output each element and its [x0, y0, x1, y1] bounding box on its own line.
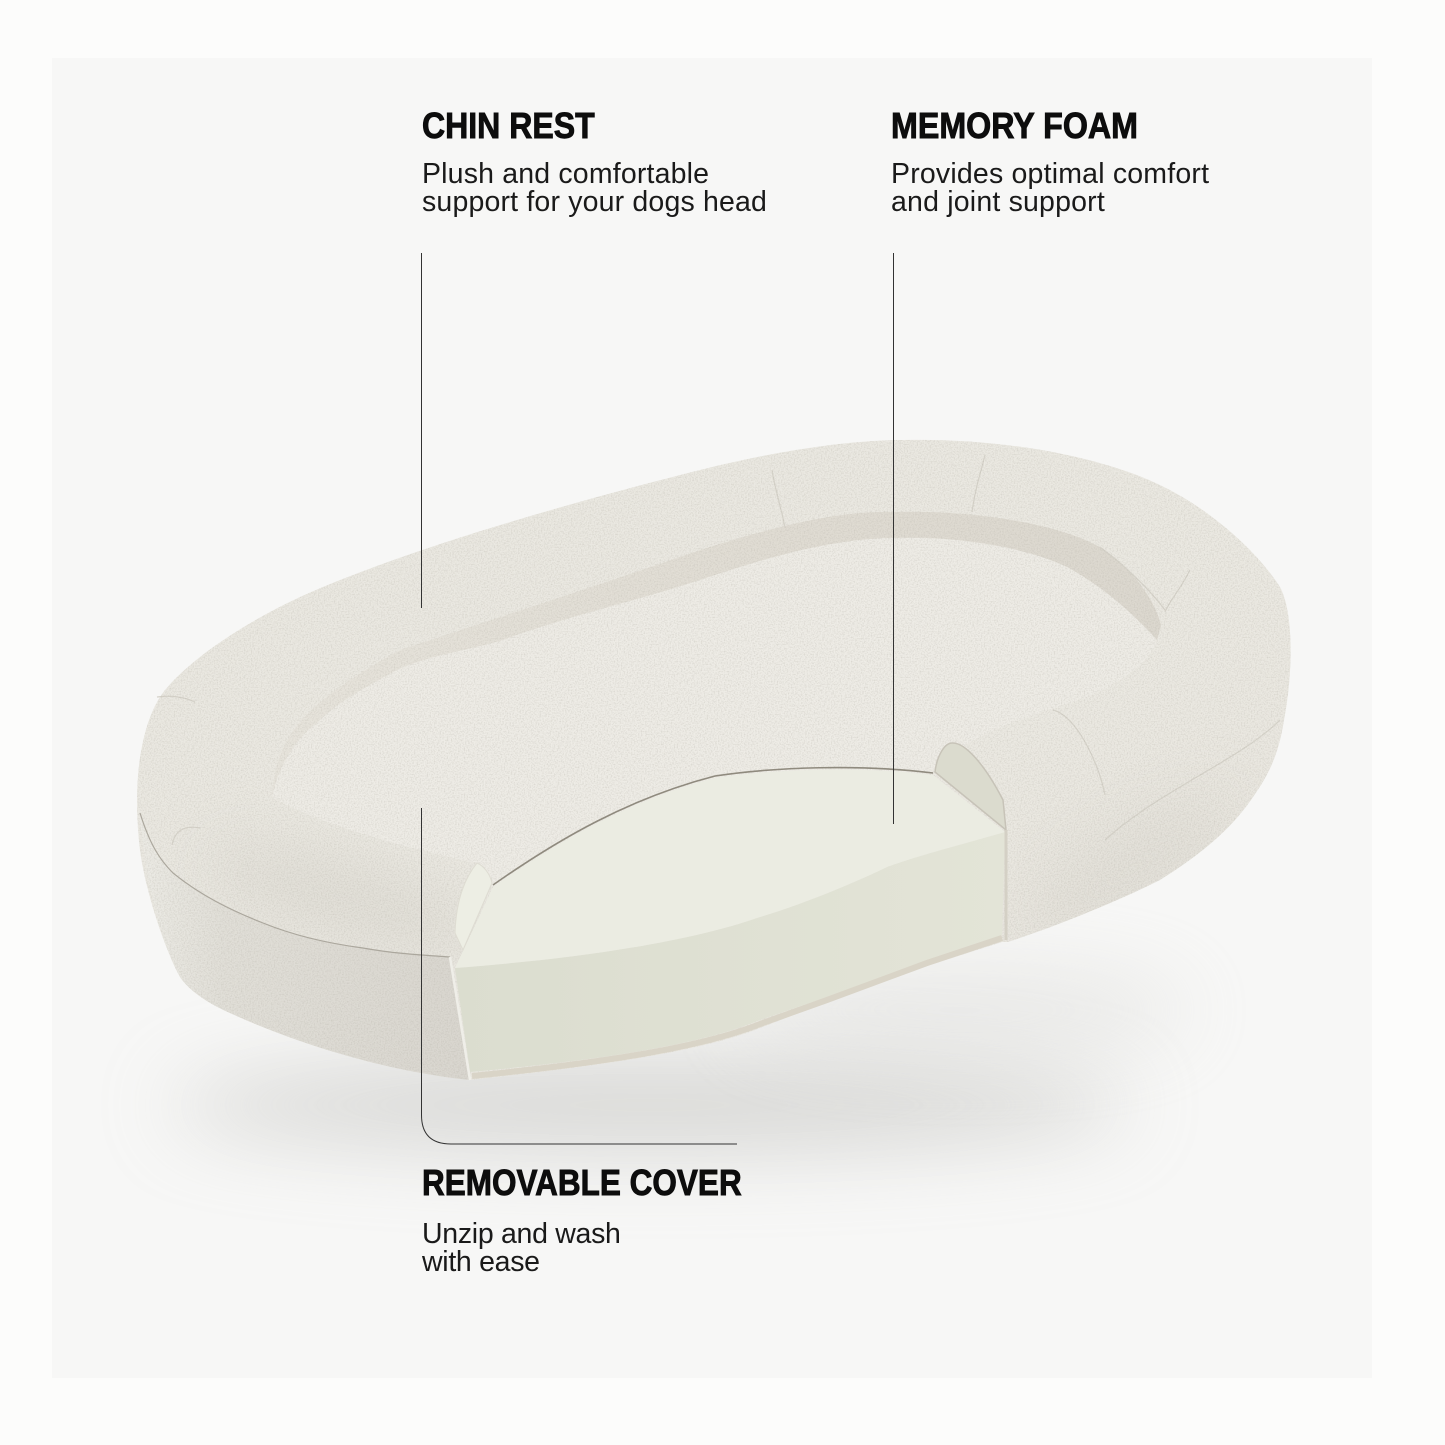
text: chin rest: support for your dogs head	[422, 186, 767, 218]
bed illustration	[137, 440, 1290, 1180]
floor shadow	[170, 970, 1190, 1151]
text: chin rest	[422, 158, 767, 218]
rim shading front left	[195, 775, 1254, 978]
heading: removable cover: REMOVABLE COVER	[422, 1162, 742, 1203]
front wall	[140, 813, 470, 1080]
text: removable cover: Unzip and wash	[422, 1218, 621, 1250]
foam side	[455, 832, 1005, 1072]
cushion cut edge	[493, 768, 933, 885]
foam disc right	[935, 743, 1006, 830]
cover flap left edge	[450, 957, 470, 1080]
text: memory foam: Provides optimal comfort	[891, 158, 1209, 190]
text: chin rest: Plush and comfortable	[422, 158, 709, 190]
text: removable cover: with ease	[422, 1246, 540, 1278]
leader line: memory foam	[893, 253, 894, 824]
inner channel	[272, 512, 1161, 797]
leader line: chin rest	[421, 253, 422, 608]
fabric texture	[130, 430, 1300, 1090]
foam disc left	[455, 863, 492, 950]
cover flap right edge	[1004, 830, 1008, 940]
foam base strip	[472, 938, 1002, 1076]
text: memory foam	[891, 158, 1209, 218]
foam top surface	[455, 770, 1005, 968]
heading: chin rest: CHIN REST	[422, 105, 595, 146]
text: memory foam: and joint support	[891, 186, 1105, 218]
leader line: removable cover	[421, 808, 737, 1144]
wall seam	[140, 813, 450, 957]
text: removable cover	[422, 1218, 621, 1278]
bed outer body	[137, 440, 1291, 1080]
cushion top	[272, 538, 1157, 887]
heading: memory foam: MEMORY FOAM	[891, 105, 1138, 146]
fabric seams	[157, 455, 1280, 845]
